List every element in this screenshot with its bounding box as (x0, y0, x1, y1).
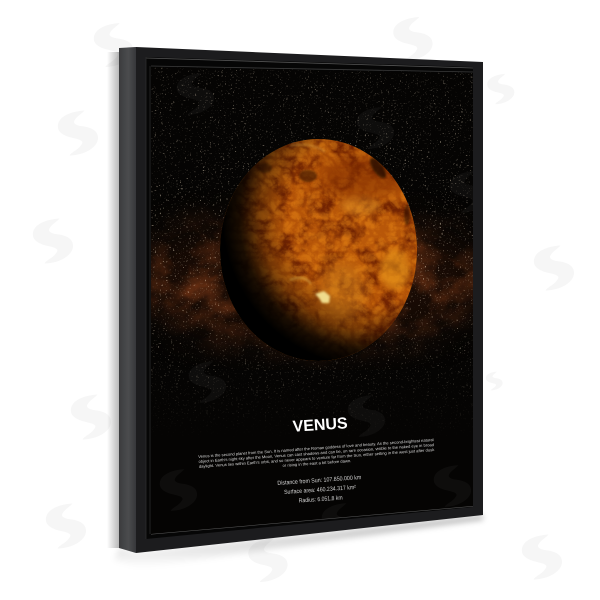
frame: front face (136, 47, 483, 553)
frame: inner recess (146, 57, 473, 539)
bright surface spot (315, 291, 330, 303)
planet statistics: Distance from Sun: 107.850.000 km (277, 475, 361, 487)
surface highlights and dark patches (258, 145, 410, 322)
nebula band (151, 210, 473, 365)
dark watermarks on poster (160, 74, 473, 519)
planet: Venus (218, 137, 420, 363)
planet statistics: Radius: 6.051,8 km (299, 495, 343, 505)
frame shadow (107, 52, 483, 568)
planet statistics (277, 475, 363, 506)
planet statistics: Surface area: 460.234.317 km² (284, 485, 356, 496)
description text block: daylight. Venus lies within Earth's orbit, and so never appears to venture far from the Sun, either setting in the west just after dusk (199, 447, 434, 469)
description text block (198, 437, 435, 474)
frame: left side face (119, 47, 136, 553)
poster: space background (151, 67, 473, 534)
description text block: object in Earth's night sky after the Moon, Venus can cast shadows and can be, on rare occasion, visible to the naked eye in broad (198, 442, 434, 464)
description text block: or rising in the east a bit before dawn. (282, 458, 352, 468)
star field (150, 65, 474, 440)
description text block: Venus is the second planet from the Sun. It is named after the Roman goddess of love and beauty. As the second-brightest natural (198, 437, 434, 459)
title: VENUS (292, 415, 349, 436)
